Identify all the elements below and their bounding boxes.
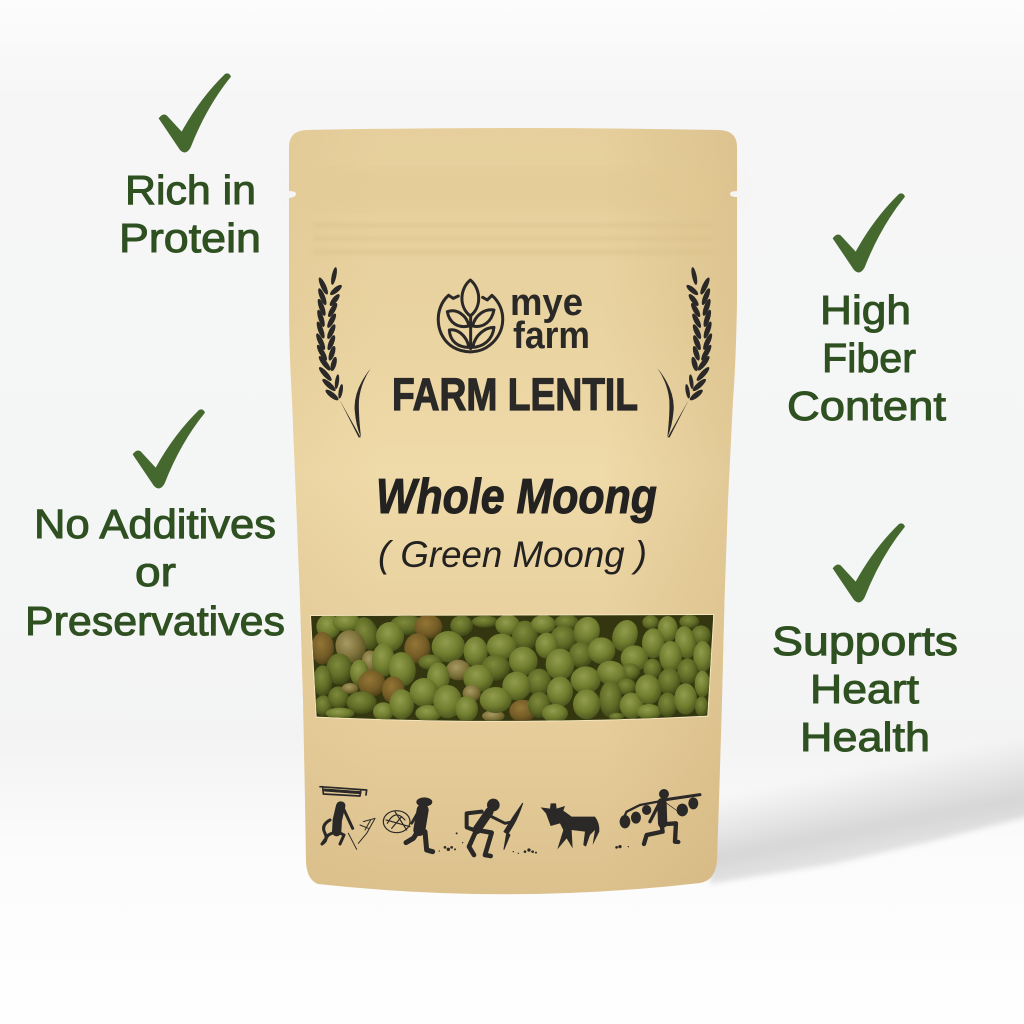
benefit: supports heart health: Heart [810,666,920,712]
benefit: rich in protein: Protein [119,215,261,261]
product line: FARM LENTIL: FARM LENTIL [392,369,638,420]
benefit: high fiber content: Content [787,383,947,429]
product subtitle: Green Moong: ( Green Moong ) [378,534,647,575]
benefit: high fiber content: Fiber [822,335,916,381]
soil specks [439,832,629,854]
benefit: rich in protein: Rich in [125,167,256,213]
benefit: supports heart health: Supports [772,618,958,664]
wheat right [658,267,714,437]
logo text: mye farm: mye [510,282,583,324]
product name: Whole Moong: Whole Moong [376,470,657,524]
pouch side shading [289,128,737,894]
benefit: no additives or preservatives: Preservatives [25,598,285,644]
pouch shadow [710,730,1024,884]
benefit: no additives or preservatives: No Additives [34,501,276,547]
tribal figures band [320,787,700,856]
wheat left [314,267,371,437]
figure: man under roof [320,787,375,849]
benefit: high fiber content: High [820,287,911,333]
check icon [833,193,905,272]
logo icon [438,280,503,352]
benefit: no additives or preservatives: or [135,549,176,595]
figure: person with basket [383,797,433,852]
logo text: mye farm [510,282,590,357]
pouch seal bands [313,175,713,254]
benefit: supports heart health: Health [800,714,930,760]
benefit: supports heart health [772,523,958,760]
pouch [289,128,737,894]
figure: bull [541,803,599,849]
check icon [159,73,231,152]
window with beans [307,612,720,728]
logo text: mye farm: farm [513,315,590,357]
check icon [833,523,905,602]
benefit: rich in protein [119,73,261,261]
benefit: no additives or preservatives [25,409,285,644]
benefit: high fiber content [787,193,947,429]
figure: farmer with blade [439,799,629,856]
check icon [133,409,205,488]
figure: porter with pots [620,789,700,844]
